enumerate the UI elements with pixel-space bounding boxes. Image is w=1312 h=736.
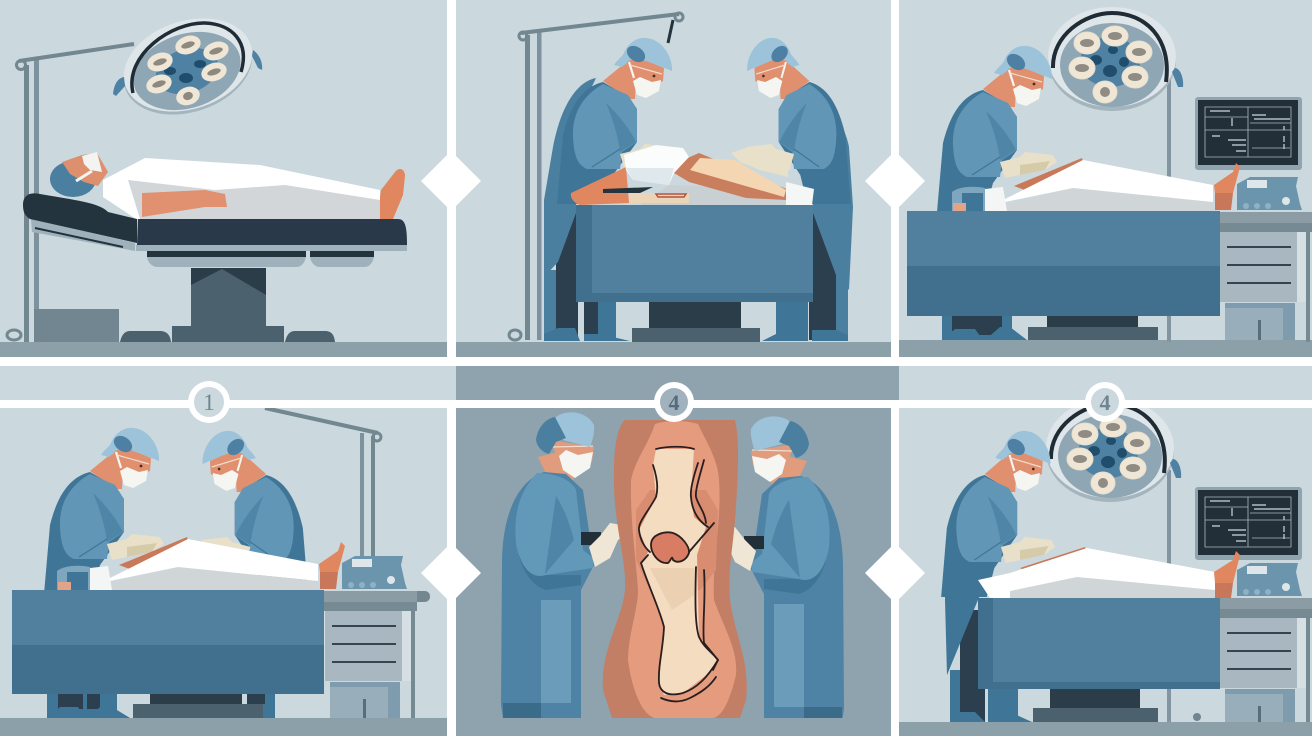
panel: surgeon with monitor <box>899 398 1312 736</box>
patient <box>571 145 814 205</box>
step badge 4 right <box>1085 382 1125 422</box>
surgical lamp <box>1048 7 1183 111</box>
lamp stand <box>265 408 381 558</box>
patient <box>50 152 405 219</box>
floor <box>899 722 1312 736</box>
legs and base <box>544 213 848 342</box>
draped table <box>576 205 813 302</box>
patient under sheet <box>57 537 345 591</box>
leg inner tissue <box>628 421 736 718</box>
floor <box>0 718 447 736</box>
cart handle <box>410 591 430 602</box>
surgeon gowns <box>544 78 853 290</box>
step badge 1: 1 <box>203 390 215 415</box>
surgeon right <box>743 38 851 204</box>
surgeon left <box>44 428 164 594</box>
knee cap <box>651 532 689 563</box>
sheet shadow <box>1010 577 1215 598</box>
bone <box>639 449 718 695</box>
bone shading <box>650 568 696 610</box>
right glove <box>731 148 789 177</box>
panel base strip <box>456 718 891 736</box>
equipment cart <box>1218 177 1312 342</box>
patient under sheet <box>952 158 1240 212</box>
step badge 4 center <box>654 382 694 422</box>
surgeon <box>937 46 1057 212</box>
surgeon left <box>501 412 629 718</box>
panel: two surgeons at table <box>0 408 447 736</box>
lamp stand <box>1167 470 1171 722</box>
draped table <box>978 598 1220 722</box>
draped table <box>12 590 324 718</box>
step badge 1 <box>188 381 230 423</box>
surgeon right <box>198 431 308 597</box>
surgeon right <box>716 416 844 722</box>
surgeon <box>941 431 1055 597</box>
equipment cart <box>323 556 417 721</box>
heel <box>1215 583 1233 598</box>
lamp stand <box>7 44 134 342</box>
knee tissue shading <box>636 490 718 590</box>
leg outer tissue <box>603 420 747 718</box>
panel: patient on operating table <box>0 3 447 357</box>
bone outlines <box>639 447 718 701</box>
patient arm <box>1020 547 1088 578</box>
monitor <box>1195 487 1302 560</box>
panel: surgeon at draped table <box>899 7 1312 357</box>
diamond connectors <box>421 151 925 603</box>
surgeon legs <box>950 610 1032 722</box>
panel: knee anatomy view <box>456 412 891 736</box>
surgeon left <box>557 38 677 204</box>
patient sheet <box>978 548 1215 598</box>
lamp stand <box>509 13 683 340</box>
lamp stand <box>1167 80 1171 342</box>
draped table <box>907 211 1220 340</box>
step badge 4 center: 4 <box>668 390 680 415</box>
surgical lamp <box>112 3 264 130</box>
step badge 4 right: 4 <box>1100 390 1110 415</box>
monitor <box>1195 97 1302 170</box>
surgical lamp <box>1046 398 1181 502</box>
equipment cart <box>1218 563 1312 728</box>
surgeon gown <box>945 510 980 675</box>
operating table <box>23 193 407 342</box>
foot <box>1214 551 1240 583</box>
panel: two surgeons beginning procedure <box>456 13 891 357</box>
